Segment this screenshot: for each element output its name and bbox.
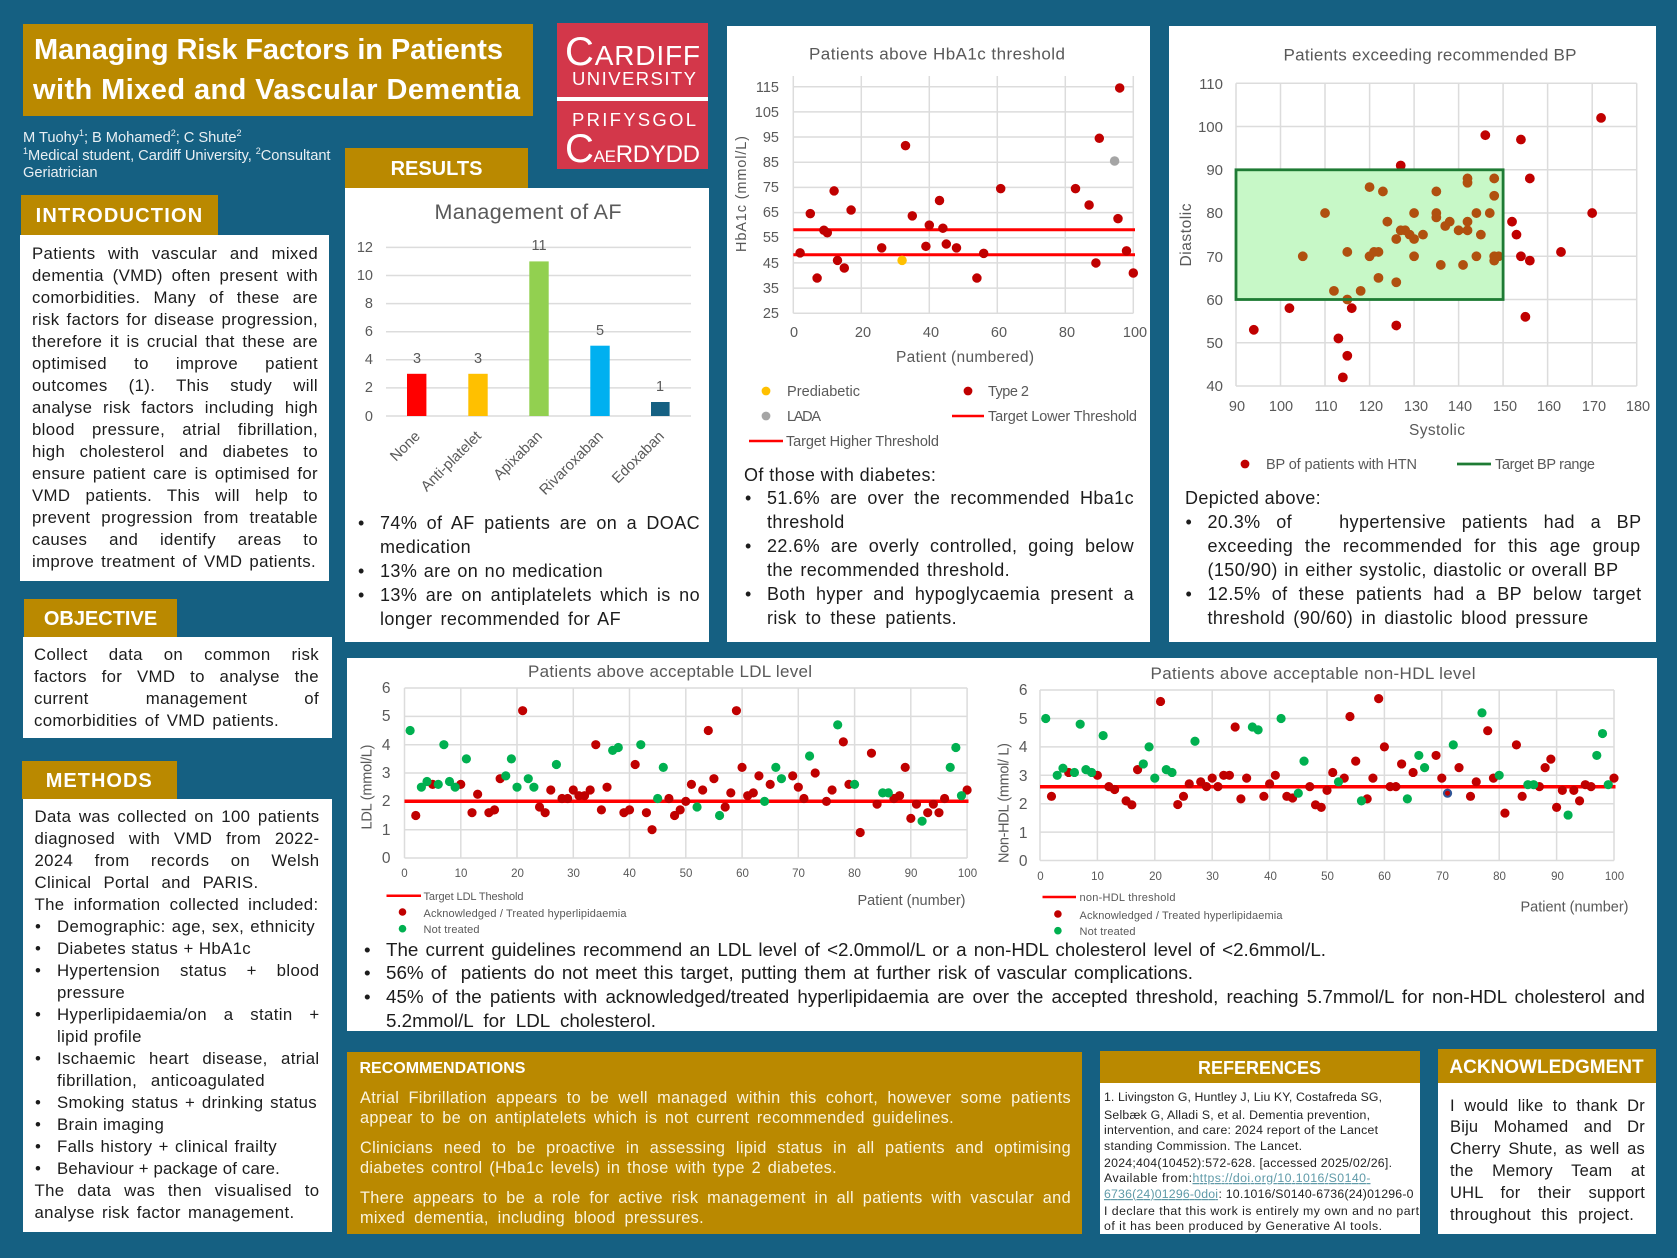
panel: methods: Hypertension status + blood [57,961,320,980]
heading: objective [24,599,177,637]
scatter chart: HbA1c: Prediabetic [787,384,860,400]
panel: HbA1c: 22.6% are overly controlled, going below [767,536,1134,556]
scatter chart: blood pressure: 90 [1229,399,1245,415]
panel: blood pressure: 20.3% of hypertensive patients had a BP [1208,512,1642,532]
panel: methods: • [35,939,41,958]
scatter chart: blood pressure: 80 [1206,205,1223,222]
heading: results: RESULTS [391,158,482,180]
panel: blood pressure: • [1186,584,1192,604]
title banner [23,24,533,116]
scatter chart: blood pressure: Target BP range [1495,457,1595,473]
panel: blood pressure: exceeding the recommended for this age group [1208,536,1640,556]
heading: methods [22,761,177,799]
panel: cholesterol [346,658,1657,1031]
panel: objective [22,637,332,738]
logo: Cardiff University: PRIFYSGOL [572,109,696,130]
panel: introduction: optimised to improve patient [32,354,318,373]
panel: results AF: • [358,561,365,581]
text: diabetes findings: Of those with diabetes: [744,465,936,485]
scatter chart: blood pressure: Diastolic [1178,203,1195,266]
scatter chart: HbA1c: 65 [763,205,779,221]
panel: HbA1c: • [745,536,752,556]
scatter chart: blood pressure: 160 [1537,399,1561,415]
text: cholesterol findings: 45% of the patients with acknowledged/treated hyperlipidaemia are over the accepted threshold, reaching 5.7mmol/L for non-HDL cholesterol and [386,986,1645,1007]
scatter chart: non-HDL: Acknowledged / Treated hyperlipidaemia [1079,910,1283,922]
scatter chart: non-HDL: 50 [1321,871,1333,883]
logo: Cardiff University: CAERDYDD [565,127,700,171]
scatter chart: LDL: 4 [381,737,390,754]
scatter chart: LDL: LDL (mmol/L) [359,744,375,830]
scatter chart: LDL: Acknowledged / Treated hyperlipidaemia [423,908,627,920]
text: recommendations body: Clinicians need to be proactive in assessing lipid status in all patients and optimising [360,1139,1071,1157]
panel: HbA1c: 51.6% are over the recommended Hba1c [767,488,1134,508]
bar chart: management of AF: 3 [474,351,482,367]
panel: introduction: comorbidities. Many of these are [32,288,318,307]
heading: introduction [21,195,218,235]
panel: methods [22,799,332,1232]
title banner: Managing Risk Factors in Patients [34,34,503,66]
panel: references [1100,1083,1420,1234]
panel: introduction: analyse risk factors including high [32,398,318,417]
scatter chart: non-HDL: 6 [1018,682,1027,699]
scatter chart: blood pressure: 50 [1206,335,1223,352]
panel: objective: factors for VMD to analyse the [34,667,319,686]
panel: methods: Data was collected on 100 patients [34,807,320,826]
panel: cholesterol: • [364,938,371,960]
authors and affiliations [23,128,330,181]
panel: methods: Falls history + clinical frailty [57,1137,277,1156]
panel: methods: 2024 from records on Welsh [34,851,320,870]
scatter chart: HbA1c: 85 [763,155,779,171]
scatter chart: LDL: 80 [848,868,860,880]
panel: methods: • [35,1115,41,1134]
scatter chart: LDL: Patient (number) [857,893,965,909]
scatter chart: blood pressure: 40 [1206,378,1223,395]
scatter chart: HbA1c: HbA1c (mmol/L) [734,136,750,252]
scatter chart: LDL: 3 [381,765,390,782]
heading: results [345,148,528,188]
text: AF findings: medication [380,537,471,557]
bar chart: management of AF [357,200,691,499]
scatter chart: LDL: 50 [679,868,692,880]
bar chart: management of AF: Management of AF [434,200,622,224]
scatter chart: HbA1c: 35 [763,281,779,297]
scatter chart: HbA1c: 115 [756,80,779,96]
scatter chart: LDL: 30 [567,868,579,880]
bar chart: management of AF: 8 [365,296,373,312]
panel: acknowledgment: Cherry Shute, as well as [1450,1140,1645,1158]
logo: Cardiff University [557,23,708,169]
text: AF findings: 13% are on no medication [380,561,603,581]
scatter chart: HbA1c: 75 [763,180,779,196]
text: cholesterol findings: 5.2mmol/L for LDL cholesterol. [386,1010,656,1031]
panel: methods: • [35,1159,41,1178]
bar chart: management of AF: 10 [357,268,373,284]
panel: HbA1c: risk to these patients. [767,608,957,628]
panel: references: Available from: [1104,1171,1192,1185]
panel: references: intervention, and care: 2024 report of the Lancet [1104,1123,1378,1137]
scatter chart: non-HDL: 40 [1264,871,1276,883]
scatter chart: non-HDL: 60 [1378,871,1390,883]
panel: methods: • [35,1137,41,1156]
scatter chart: HbA1c: LADA [787,409,821,425]
panel: methods: Smoking status + drinking status [57,1093,317,1112]
authors and affiliations: 1Medical student, Cardiff University, 2Consultant [23,146,330,164]
scatter chart: non-HDL: 0 [1018,853,1027,870]
scatter chart: HbA1c: Patient (numbered) [896,349,1034,366]
panel: methods: Hyperlipidaemia/on a statin + [57,1005,320,1024]
panel: introduction: dementia (VMD) often present with [32,266,318,285]
scatter chart: non-HDL: Patients above acceptable non-HDL level [1150,664,1475,683]
panel: references: standing Commission. The Lancet. [1104,1139,1302,1153]
scatter chart: blood pressure: 60 [1206,292,1223,309]
panel: methods: Behaviour + package of care. [57,1159,280,1178]
scatter chart: blood pressure: BP of patients with HTN [1266,457,1417,473]
panel: blood pressure [1169,26,1656,642]
scatter chart: HbA1c: 105 [755,105,779,121]
scatter chart: blood pressure: 100 [1269,399,1293,415]
panel: introduction: Patients with vascular and mixed [32,244,318,263]
scatter chart: non-HDL: Patient (number) [1520,900,1628,916]
scatter chart: blood pressure: 170 [1582,399,1606,415]
panel: references: : 10.1016/S0140-6736(24)01296-0 [1218,1187,1413,1201]
scatter chart: LDL: Not treated [423,924,479,936]
scatter chart: non-HDL: 10 [1091,871,1103,883]
panel: methods: • [35,961,41,980]
panel: recommendations [346,1052,1082,1234]
scatter chart: HbA1c: Patients above HbA1c threshold [809,44,1065,64]
scatter chart: non-HDL: 90 [1551,871,1563,883]
scatter chart: non-HDL: 20 [1149,871,1161,883]
panel: introduction: therefore it is crucial that these are [32,332,318,351]
panel: HbA1c: threshold [767,512,845,532]
scatter chart: blood pressure: 130 [1404,399,1428,415]
panel: introduction: outcomes (1). This study will [32,376,318,395]
scatter chart: blood pressure: 140 [1448,399,1472,415]
scatter chart: LDL: 2 [381,793,390,810]
bar chart: management of AF: 11 [531,238,547,254]
scatter chart: HbA1c: 95 [763,130,779,146]
scatter chart: LDL: 6 [381,680,390,697]
scatter chart: blood pressure: 150 [1493,399,1517,415]
text: cholesterol findings: The current guidelines recommend an LDL level of <2.0mmol/L or a non-HDL cholesterol level of <2.6mmol/L. [386,938,1326,960]
panel: methods: Demographic: age, sex, ethnicity [57,917,315,936]
authors and affiliations: M Tuohy1; B Mohamed2; C Shute2 [23,128,242,146]
scatter chart: non-HDL: Not treated [1079,926,1135,938]
panel: methods: fibrillation, anticoagulated [57,1071,265,1090]
panel: references: of it has been produced by Generative AI tools. [1104,1219,1382,1233]
panel: introduction: VMD patients. This will help to [32,486,318,505]
heading: references: REFERENCES [1198,1058,1321,1078]
text: AF findings [358,513,700,629]
scatter chart: LDL: Target LDL Theshold [423,891,523,903]
panel: methods: • [35,917,41,936]
scatter chart: non-HDL: 0 [1037,871,1043,883]
scatter chart: HbA1c: 60 [991,325,1007,341]
scatter chart: non-HDL: 4 [1018,739,1027,756]
text: recommendations body: Atrial Fibrillation appears to be well managed within this cohort, however some patients [360,1089,1071,1107]
scatter chart: blood pressure: 180 [1626,399,1650,415]
scatter chart: non-HDL [996,664,1628,938]
logo: Cardiff University: UNIVERSITY [572,68,696,89]
panel: methods: analyse risk factor management. [34,1203,294,1222]
text: cholesterol findings: 56% of patients do not meet this target, putting them at further risk of vascular complications. [386,962,1193,983]
scatter chart: blood pressure: 120 [1359,399,1383,415]
panel: results AF [345,188,709,642]
panel: references: Selbæk G, Alladi S, et al. Dementia prevention, [1104,1108,1370,1122]
text: AF findings: 13% are on antiplatelets which is no [380,585,700,605]
panel: methods: • [35,1005,41,1024]
bar chart: management of AF: 0 [365,409,373,425]
panel: acknowledgment: the Memory Team at [1450,1162,1645,1180]
scatter chart: non-HDL: 1 [1018,825,1027,842]
heading: recommendations: RECOMMENDATIONS [360,1060,525,1077]
scatter chart: HbA1c: Target Lower Threshold [988,409,1137,425]
scatter chart: non-HDL: 80 [1493,871,1505,883]
panel: references: 1. Livingston G, Huntley J, Liu KY, Costafreda SG, [1104,1090,1382,1104]
panel: methods: The data was then visualised to [34,1181,320,1200]
heading: acknowledgment: ACKNOWLEDGMENT [1449,1056,1644,1078]
title banner: with Mixed and Vascular Dementia [32,74,521,106]
scatter chart: LDL: 10 [454,868,467,880]
scatter chart: HbA1c: 100 [1123,325,1147,341]
bar chart: management of AF: 1 [656,379,664,395]
text: recommendations body: There appears to be a role for active risk management in all patients with vascular and [360,1189,1071,1207]
scatter chart: non-HDL: 3 [1018,768,1027,785]
panel: introduction: ensure patient care is optimised for [32,464,318,483]
heading: references [1100,1051,1420,1083]
bar chart: management of AF: 2 [365,380,373,396]
panel: introduction: improve treatment of VMD patients. [32,552,316,571]
panel: references: 2024;404(10452):572-628. [accessed 2025/02/26]. [1104,1156,1392,1170]
bar chart: management of AF: 4 [365,352,373,368]
scatter chart: LDL: 70 [792,868,804,880]
heading: objective: OBJECTIVE [44,608,157,630]
panel: introduction: blood pressure, atrial fibrillation, [32,420,318,439]
panel: blood pressure: threshold (90/60) in diastolic blood pressure [1208,608,1588,628]
scatter chart: LDL: 5 [381,708,390,725]
bar chart: management of AF: Edoxaban [609,429,668,487]
panel: results AF: • [358,513,365,533]
panel: blood pressure: • [1186,512,1192,532]
text: AF findings: 74% of AF patients are on a DOAC [380,513,700,533]
scatter chart: blood pressure: 100 [1198,119,1223,136]
scatter chart: LDL: 20 [511,868,523,880]
scatter chart: non-HDL: Non-HDL (mmol/ L) [996,743,1012,863]
scatter chart: blood pressure: Patients exceeding recommended BP [1284,46,1576,64]
text: recommendations body: mixed dementia, including blood pressures. [360,1209,704,1227]
scatter chart: HbA1c: Target Higher Threshold [786,434,939,450]
scatter chart: HbA1c: 25 [763,306,779,322]
panel: acknowledgment: I would like to thank Dr [1450,1096,1645,1114]
scatter chart: HbA1c: 80 [1059,325,1075,341]
panel: objective: Collect data on common risk [34,645,319,664]
scatter chart: HbA1c: 45 [763,256,779,272]
scatter chart: LDL: 60 [736,868,748,880]
panel: blood pressure: (150/90) in either systolic, diastolic or overall BP [1208,560,1618,580]
scatter chart: non-HDL: 100 [1604,871,1624,883]
scatter chart: non-HDL: non-HDL threshold [1079,892,1175,904]
panel: HbA1c: • [745,584,752,604]
panel: methods: • [35,1049,41,1068]
panel: blood pressure: 12.5% of these patients had a BP below target [1208,584,1642,604]
panel: acknowledgment: UHL for their support [1450,1184,1645,1202]
scatter chart: blood pressure: 70 [1206,249,1223,266]
panel: HbA1c: the recommended threshold. [767,560,1010,580]
scatter chart: HbA1c: 0 [790,325,798,341]
panel: references: https://doi.org/10.1016/S0140- [1192,1171,1370,1185]
bar chart: management of AF: 3 [413,351,421,367]
panel: methods: The information collected included: [34,895,318,914]
scatter chart: LDL: 0 [381,850,390,867]
panel: methods: Brain imaging [57,1115,164,1134]
scatter chart: blood pressure: Systolic [1409,422,1465,439]
scatter chart: HbA1c: 40 [923,325,939,341]
panel: methods: Ischaemic heart disease, atrial [57,1049,320,1068]
panel: introduction: high cholesterol and diabetes to [32,442,318,461]
scatter chart: non-HDL: 70 [1436,871,1448,883]
bar chart: management of AF: 6 [365,324,373,340]
bar chart: management of AF: Rivaroxaban [537,429,607,499]
scatter chart: LDL [359,662,977,936]
scatter chart: LDL: 100 [957,868,977,880]
heading: introduction: INTRODUCTION [36,205,203,227]
panel: methods: • [35,1093,41,1112]
panel: methods: lipid profile [57,1027,142,1046]
text: blood pressure findings: Depicted above: [1185,488,1321,508]
text: AF findings: longer recommended for AF [380,609,621,629]
panel: HbA1c: Both hyper and hypoglycaemia present a [767,584,1134,604]
bar chart: management of AF: Apixaban [491,429,546,483]
panel: methods: Diabetes status + HbA1c [57,939,251,958]
scatter chart: HbA1c [734,44,1147,450]
scatter chart: LDL: 90 [904,868,917,880]
scatter chart: non-HDL: 30 [1206,871,1218,883]
panel: HbA1c [727,26,1150,642]
panel: cholesterol: • [364,962,371,983]
panel: introduction: causes and identify areas to [32,530,318,549]
logo: Cardiff University: CARDIFF [565,30,700,74]
text: recommendations body [360,1089,1071,1227]
panel: results AF: • [358,585,365,605]
panel: methods: pressure [57,983,125,1002]
text: recommendations body: appear to be on antiplatelets which is not current recommended guidelines. [360,1109,954,1127]
bar chart: management of AF: 12 [357,240,373,256]
panel: introduction: prevent progression from treatable [32,508,318,527]
scatter chart: LDL: 40 [623,868,635,880]
panel: cholesterol: • [364,986,371,1007]
scatter chart: blood pressure: 90 [1206,162,1223,179]
scatter chart: LDL: 1 [381,822,390,839]
scatter chart: non-HDL: 5 [1018,711,1027,728]
bar chart: management of AF: 5 [596,323,604,339]
scatter chart: LDL: Patients above acceptable LDL level [528,662,812,681]
heading: acknowledgment [1438,1049,1656,1083]
panel: acknowledgment: throughout this project. [1450,1206,1634,1224]
scatter chart: HbA1c: 20 [855,325,871,341]
bar chart: management of AF: None [388,429,424,465]
scatter chart: blood pressure [1178,46,1650,473]
panel: HbA1c: • [745,488,752,508]
panel: acknowledgment: Biju Mohamed and Dr [1450,1118,1645,1136]
panel: references: I declare that this work is entirely my own and no part [1104,1204,1419,1218]
text: recommendations body: diabetes control (Hba1c levels) in those with type 2 diabetes. [360,1159,837,1177]
text: cholesterol findings [364,938,1645,1031]
panel: methods: diagnosed with VMD from 2022- [34,829,320,848]
heading: methods: METHODS [46,770,153,792]
scatter chart: blood pressure: 110 [1199,76,1223,93]
bar chart: management of AF: Anti-platelet [418,429,485,495]
authors and affiliations: Geriatrician [23,165,98,181]
panel: methods: Clinical Portal and PARIS. [34,873,258,892]
scatter chart: LDL: 0 [401,868,407,880]
panel: acknowledgment [1438,1083,1656,1234]
panel: objective: comorbidities of VMD patients. [34,711,279,730]
panel: objective: current management of [34,689,319,708]
scatter chart: HbA1c: Type 2 [988,384,1029,400]
panel: references: 6736(24)01296-0doi [1104,1187,1218,1201]
scatter chart: HbA1c: 55 [763,230,779,246]
panel: introduction: risk factors for disease progression, [32,310,318,329]
panel: introduction [20,235,329,581]
scatter chart: non-HDL: 2 [1018,796,1027,813]
scatter chart: blood pressure: 110 [1314,399,1338,415]
